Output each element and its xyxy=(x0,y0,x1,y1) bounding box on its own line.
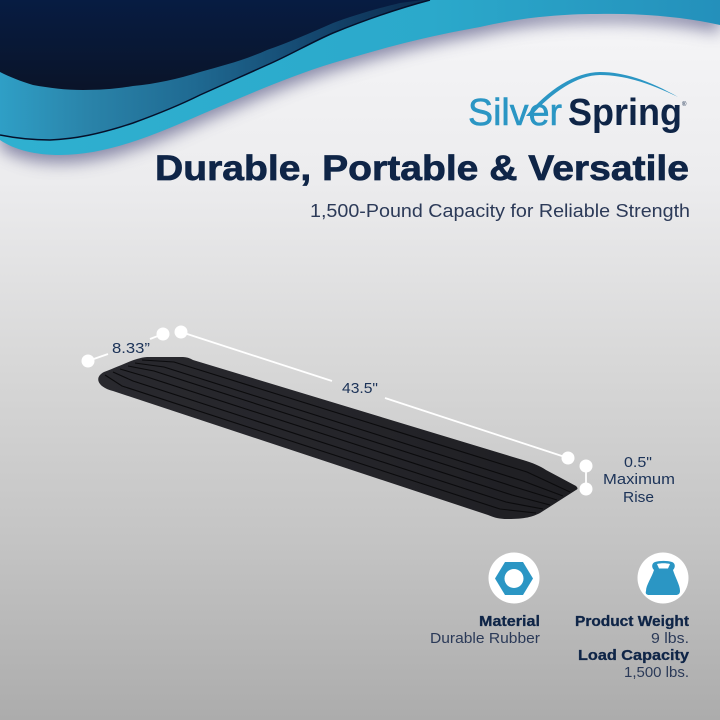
spec: weight and capacity: 9 lbs. xyxy=(651,631,689,647)
icon: hex nut xyxy=(488,552,540,604)
spec: material xyxy=(430,614,540,647)
dimension: length 43.5: 43.5" xyxy=(342,380,378,397)
spec: weight and capacity: 1,500 lbs. xyxy=(624,665,689,681)
spec: weight and capacity: Product Weight xyxy=(575,614,689,630)
spec: weight and capacity xyxy=(575,614,689,681)
spec: weight and capacity: Load Capacity xyxy=(578,648,689,664)
dimension: maximum rise: 0.5" xyxy=(624,454,652,471)
header swoosh xyxy=(0,0,720,163)
dimension: maximum rise: Rise xyxy=(623,489,654,506)
icon: weight xyxy=(638,552,688,604)
logo arc xyxy=(526,72,678,116)
logo wordmark: Spring xyxy=(568,92,682,134)
dimension: maximum rise: Maximum xyxy=(603,471,675,488)
dimension: width 8.33: 8.33” xyxy=(112,340,150,357)
ramp product image xyxy=(98,357,577,519)
subtitle: 1,500-Pound Capacity for Reliable Strength xyxy=(310,200,690,221)
spec: material: Material xyxy=(479,614,540,630)
spec: material: Durable Rubber xyxy=(430,631,540,647)
title: Durable, Portable & Versatile xyxy=(155,148,689,188)
logo: SilverSpring xyxy=(468,72,687,134)
dimension: length 43.5 xyxy=(174,326,574,464)
dimension: width 8.33 xyxy=(82,328,170,368)
dimension: maximum rise xyxy=(580,454,675,506)
logo wordmark: Silver xyxy=(468,92,562,134)
registered mark: ® xyxy=(682,101,687,108)
